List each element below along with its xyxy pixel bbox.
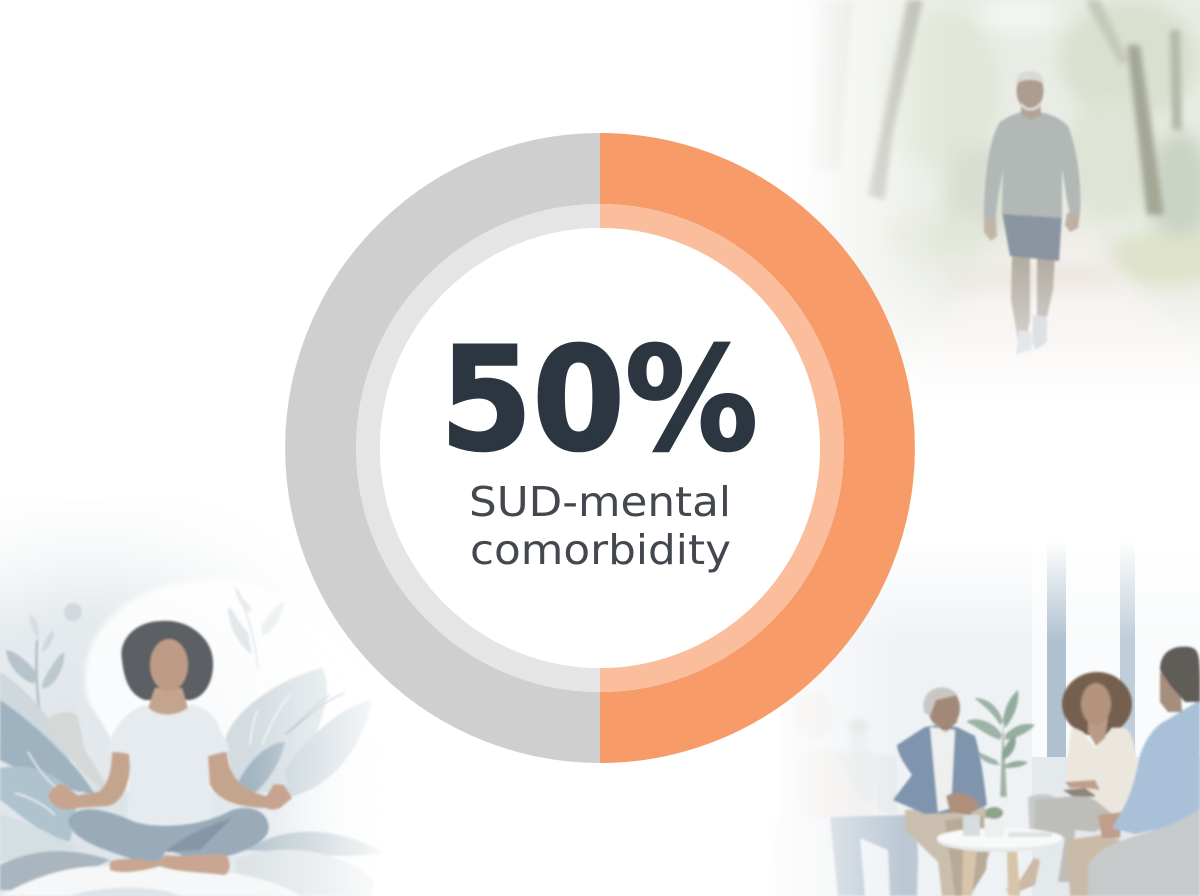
seated older man <box>905 806 992 896</box>
chair back behind seated man <box>873 755 897 815</box>
walking man <box>984 71 1080 354</box>
left person jeans <box>830 815 918 896</box>
photo: man walking on forest path <box>818 0 1200 355</box>
stat: 50%: 50% <box>440 316 758 483</box>
small shelf items <box>850 720 870 798</box>
inner ring: pale grey half <box>368 216 600 680</box>
illustration: woman meditating among leaves <box>0 545 380 896</box>
coffee table <box>962 850 977 896</box>
leaves <box>0 672 72 760</box>
photo: group therapy session <box>803 550 1200 896</box>
path <box>1060 245 1126 301</box>
center disc <box>380 228 820 668</box>
sprig right <box>238 590 258 670</box>
meditating woman figure <box>48 621 292 875</box>
donut chart: 50 percent <box>321 168 879 728</box>
outer ring: grey half <box>321 168 600 728</box>
white swoosh behind figure <box>84 584 291 792</box>
label: SUD-mental comorbidity <box>469 478 731 574</box>
window frames <box>1047 530 1066 757</box>
outer ring: orange half <box>600 168 879 728</box>
label: SUD-mental comorbidity: SUD-mental <box>469 478 731 526</box>
right man <box>1067 835 1120 896</box>
label: SUD-mental comorbidity: comorbidity <box>470 526 731 574</box>
woman with clipboard <box>1028 794 1062 848</box>
inner ring: pale orange half <box>600 216 832 680</box>
plant <box>966 690 1036 798</box>
tree trunks <box>812 0 1182 215</box>
sprig left <box>34 639 41 708</box>
left faded person <box>860 807 863 814</box>
